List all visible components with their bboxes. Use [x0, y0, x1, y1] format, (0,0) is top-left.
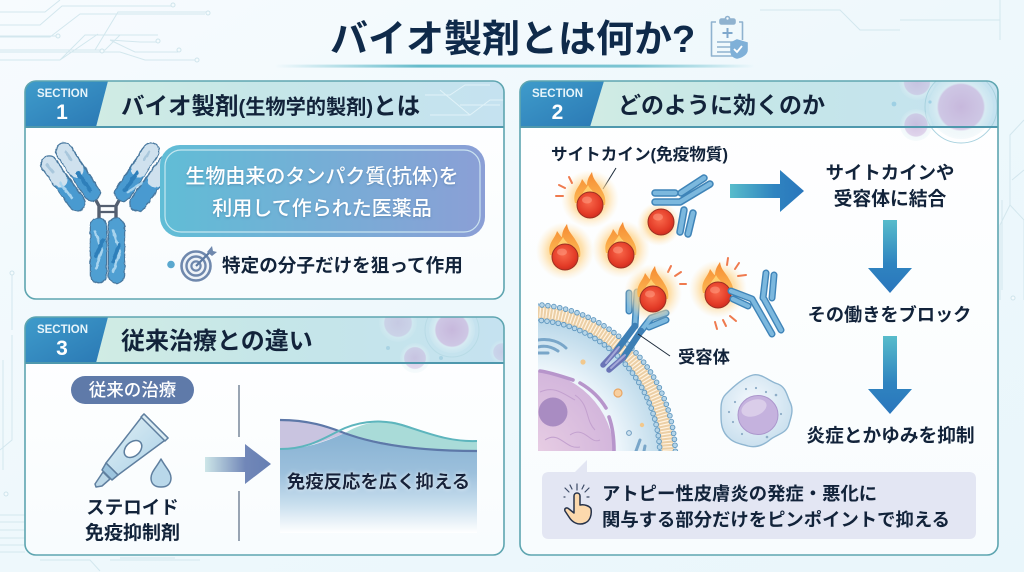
icon: antibody blocking cytokine [731, 273, 781, 334]
chart: broad immune suppression waves: 免疫反応を広く抑える [287, 471, 470, 492]
callout: definition [160, 145, 485, 237]
cytokine group [536, 170, 747, 329]
label: receptor [638, 334, 731, 367]
step: binds to cytokines and receptors [826, 162, 954, 209]
panel: section 3 [25, 303, 514, 555]
callout: pinpoint suppression [542, 460, 976, 539]
header band: section 1 [25, 81, 504, 128]
section label 2 [532, 88, 583, 124]
panel: section 2 [520, 64, 998, 555]
step: binds to cytokines and receptors: 受容体に結合 [834, 187, 947, 209]
icon: antibody binding cytokine [655, 178, 710, 234]
step: blocks function: その働きをブロック [808, 304, 971, 325]
heading: section 1: バイオ製剤(生物学的製剤)とは [121, 93, 420, 119]
section label 1: SECTION [37, 88, 88, 100]
callout: definition: 利用して作られた医薬品 [212, 197, 432, 220]
icon: antibody [47, 151, 168, 275]
section label 1 [37, 88, 88, 124]
membrane [530, 304, 676, 458]
panel: section 1 [25, 81, 504, 299]
label: immunosuppressant: 免疫抑制剤 [85, 521, 180, 544]
pill label: conventional treatment: 従来の治療 [89, 380, 177, 400]
callout: definition: 生物由来のタンパク質(抗体)を [185, 165, 459, 188]
arrow: to suppression [868, 336, 912, 414]
header band: section 2 [520, 82, 998, 144]
organelles [538, 339, 645, 451]
arrow: to block [868, 220, 912, 293]
section label 2: SECTION [532, 88, 583, 100]
chart: broad immune suppression waves [280, 420, 477, 533]
leader line: cytokine [603, 168, 616, 189]
heading: section 2: どのように効くのか [618, 92, 825, 118]
section label 3: 3 [56, 337, 68, 360]
icon: target [182, 246, 217, 280]
section label 1: 1 [56, 101, 68, 124]
icon: ointment tube [95, 414, 171, 487]
icon: receptor on membrane [603, 292, 666, 370]
nucleus [530, 371, 614, 455]
arrow: conventional to effect [205, 444, 271, 484]
section label 3 [37, 324, 88, 360]
bullet: targeted action: 特定の分子だけを狙って作用 [222, 255, 463, 276]
step: binds to cytokines and receptors: サイトカインや [826, 162, 954, 183]
label: cytokine: サイトカイン(免疫物質) [551, 145, 728, 164]
divider [238, 385, 240, 541]
title: バイオ製剤とは何か? [330, 19, 695, 61]
section label 2: 2 [552, 101, 563, 124]
icon: clipboard with shield [712, 16, 747, 58]
callout: pinpoint suppression: アトピー性皮膚炎の発症・悪化に [602, 483, 877, 504]
title underline [275, 65, 755, 68]
header band: section 3 [26, 318, 504, 372]
section label 3: SECTION [37, 324, 88, 336]
callout: pinpoint suppression: 関与する部分だけをピンポイントで抑える [602, 509, 950, 530]
pill label: conventional treatment [71, 376, 194, 404]
step: suppresses inflammation and itch: 炎症とかゆみを抑制 [806, 425, 975, 446]
label: receptor: 受容体 [678, 347, 731, 367]
bullet: targeted action [167, 246, 463, 280]
arrow: to binding [730, 170, 804, 212]
illustration: cell with membrane [530, 304, 676, 458]
cytokine bound to receptor [624, 264, 682, 322]
icon: immune cell [721, 375, 792, 447]
icon: tapping hand [564, 484, 591, 524]
label: steroid: ステロイド [86, 497, 179, 518]
heading: section 3: 従来治療との違い [121, 328, 313, 355]
